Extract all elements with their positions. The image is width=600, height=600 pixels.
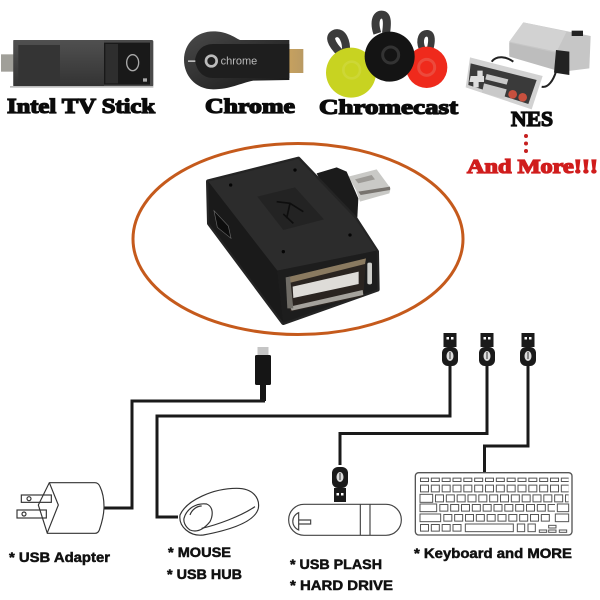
icon: USB plug 1 <box>442 333 458 366</box>
icon: keyboard <box>415 473 572 535</box>
label: Chrome: Chrome <box>205 94 295 118</box>
label: NES: NES <box>511 107 553 131</box>
label: And More: And More!!! <box>467 156 598 178</box>
label: USB PLASH and HARD DRIVE: * HARD DRIVE <box>290 577 393 593</box>
icon: USB plug 3 <box>520 333 536 366</box>
label: USB PLASH and HARD DRIVE <box>290 556 393 593</box>
device: Chromecast trio <box>326 15 447 98</box>
icon: micro USB plug <box>255 347 271 401</box>
label: Intel TV Stick: Intel TV Stick <box>7 94 155 118</box>
label: MOUSE and USB HUB <box>167 544 242 582</box>
photo: micro USB OTG adapter <box>208 159 391 323</box>
icon: USB flash drive <box>289 504 401 535</box>
label: Keyboard and MORE: * Keyboard and MORE <box>414 545 572 561</box>
label: USB Adapter: * USB Adapter <box>9 549 111 565</box>
device: Chrome dongle: chrome <box>221 55 257 67</box>
icon: vertical dots <box>524 134 528 153</box>
icon: USB plug for flash drive <box>332 467 348 502</box>
label: USB PLASH and HARD DRIVE: * USB PLASH <box>290 556 382 572</box>
label: Chromecast: Chromecast <box>319 95 458 119</box>
connector: power cable <box>104 401 265 508</box>
label: MOUSE and USB HUB: * USB HUB <box>167 566 242 582</box>
connector: flash drive cable <box>340 365 487 465</box>
device: NES console and controller <box>466 22 591 109</box>
connector: mouse and hub cable <box>157 365 450 517</box>
connector: keyboard cable <box>484 365 528 472</box>
device: Intel TV Stick <box>1 40 153 88</box>
icon: USB plug 2 <box>479 333 495 366</box>
icon: USB wall adapter <box>17 483 104 533</box>
label: MOUSE and USB HUB: * MOUSE <box>168 544 231 560</box>
callout: orange ellipse <box>133 144 463 334</box>
device: Chrome dongle <box>184 31 303 89</box>
icon: mouse <box>180 488 259 535</box>
